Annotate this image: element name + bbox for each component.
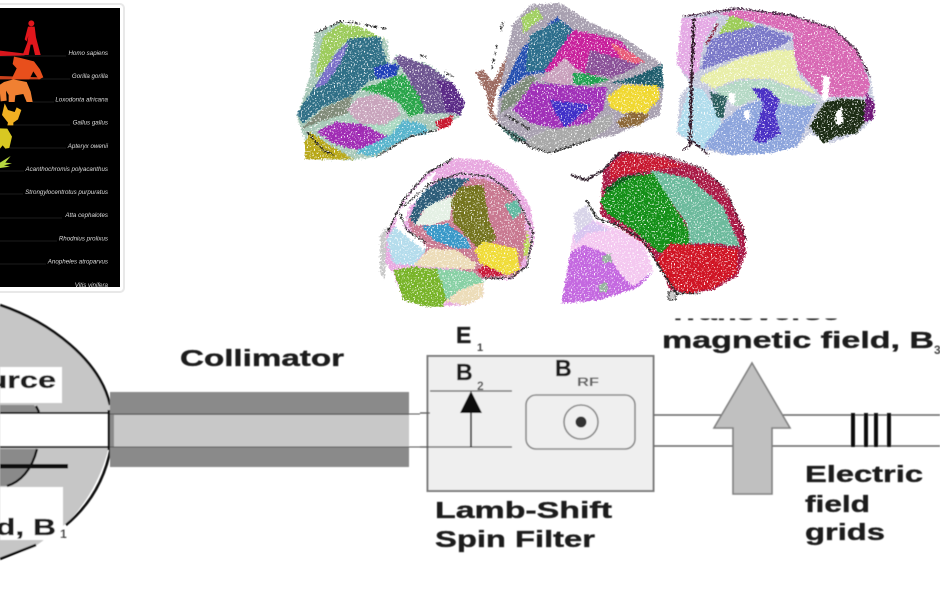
- species labels: Apteryx owenii: [67, 143, 109, 150]
- label: electric field grids: Electric: [805, 461, 923, 487]
- arrow: B2 field: [460, 391, 482, 447]
- label: BRF: RF: [577, 375, 599, 389]
- label: E1: E: [456, 322, 471, 348]
- brain section 1: [297, 22, 465, 160]
- label: transverse (cut off): Transverse: [668, 299, 840, 325]
- label: collimator: Collimator: [180, 345, 344, 371]
- label: magnetic field B3: magnetic field, B: [662, 327, 934, 353]
- brain section 3: [677, 8, 875, 155]
- species guide lines: [0, 56, 70, 264]
- label: field B1: [0, 514, 67, 541]
- species labels: Atta cephalotes: [64, 212, 108, 219]
- collimator tube: [110, 392, 420, 467]
- label: E1: 1: [477, 342, 483, 354]
- label: electric field grids: [805, 461, 923, 545]
- electric field grids: [853, 413, 889, 447]
- label: B2: [456, 359, 484, 393]
- panel: species silhouettes: [0, 4, 124, 292]
- icons: animal silhouettes: [0, 20, 43, 168]
- species labels: Vitis vinifera: [75, 282, 109, 289]
- brain section 5: [562, 152, 747, 303]
- species labels: Homo sapiens: [68, 50, 108, 57]
- label: BRF: [555, 355, 599, 389]
- RF cavity: [526, 395, 635, 449]
- beam lines: [654, 415, 940, 446]
- brain section 2: [475, 3, 664, 153]
- brain section 4: [380, 158, 535, 307]
- label: BRF: B: [555, 355, 572, 381]
- species labels: Acanthochromis polyacanthus: [24, 166, 108, 173]
- label: E1: [456, 322, 483, 354]
- species labels: Gallus gallus: [73, 120, 108, 126]
- label: B2: 2: [477, 379, 484, 393]
- label: field B1: 1: [60, 527, 67, 541]
- label: magnetic field B3: [662, 327, 940, 357]
- label: Lamb-Shift Spin Filter: [435, 497, 612, 552]
- Lamb-shift spin filter box: [420, 356, 654, 491]
- species labels: [24, 50, 109, 289]
- ion source chamber: [0, 304, 112, 600]
- species labels: Loxodonta africana: [55, 96, 109, 104]
- label: Lamb-Shift Spin Filter: Spin Filter: [435, 526, 595, 552]
- label: electric field grids: grids: [805, 519, 885, 545]
- arrow: transverse magnetic field: [714, 363, 790, 494]
- label: Lamb-Shift Spin Filter: Lamb-Shift: [435, 497, 612, 523]
- diagram: Lamb-shift polarimeter beamline: [0, 303, 940, 561]
- species labels: Anopheles atroparvus: [47, 258, 108, 266]
- label: electric field grids: field: [805, 491, 870, 517]
- label: B2: B: [456, 359, 473, 385]
- species labels: Strongylocentrotus purpuratus: [25, 189, 108, 196]
- species labels: Rhodnius prolixus: [59, 236, 108, 242]
- species labels: Gorilla gorilla: [72, 73, 109, 80]
